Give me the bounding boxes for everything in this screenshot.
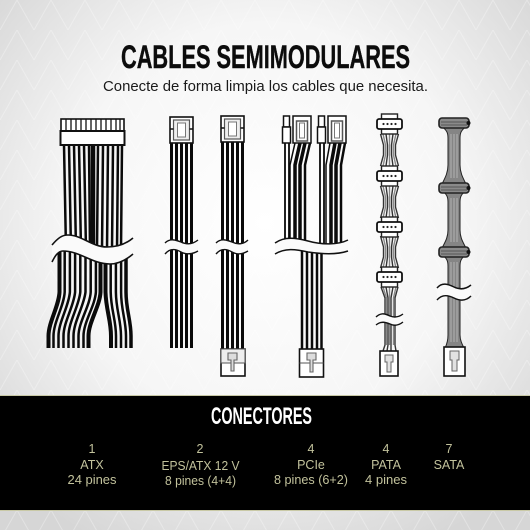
cable: EPS/ATX 12 V, right: [216, 116, 248, 376]
PCIe wires: [285, 143, 345, 350]
EPS cable break: [216, 240, 248, 254]
PATA wire segments: [380, 134, 398, 166]
column: SATA: [434, 442, 465, 472]
PATA connectors: [377, 114, 402, 134]
PATA bottom connector: [380, 351, 398, 376]
column: ATX: 1: [89, 442, 96, 456]
column: PATA: PATA: [371, 458, 402, 472]
EPS wires: [172, 143, 192, 348]
EPS connector: [170, 117, 193, 143]
column: PCIe: [274, 442, 348, 487]
column: PCIe: PCIe: [297, 458, 325, 472]
column: PATA: 4 pines: [365, 473, 407, 487]
column: ATX: 24 pines: [68, 473, 116, 487]
ATX upper wires: [64, 145, 122, 250]
EPS cable break: [165, 240, 198, 254]
column: EPS/ATX 12 V: 8 pines (4+4): [165, 474, 236, 488]
SATA bottom connector: [444, 347, 465, 376]
EPS wires: [222, 142, 242, 350]
column: PATA: [365, 442, 407, 487]
column: EPS/ATX 12 V: EPS/ATX 12 V: [162, 459, 240, 473]
column: PCIe: 4: [308, 442, 315, 456]
PCIe cable break: [275, 238, 348, 254]
connectors panel: [0, 395, 530, 511]
column: PCIe: 8 pines (6+2): [274, 473, 348, 487]
subtitle: Conecte de forma limpia los cables que necesita.: [103, 78, 428, 95]
EPS bottom connector: [221, 349, 245, 376]
cable: PATA: [376, 114, 403, 376]
column: EPS/ATX 12 V: [162, 442, 240, 488]
column: PATA: 4: [383, 442, 390, 456]
column: EPS/ATX 12 V: 2: [197, 442, 204, 456]
PCIe connector group 2: [318, 116, 346, 143]
ATX lower wires, splitting into two bundles: [48, 250, 131, 348]
SATA wire highlights: [451, 134, 457, 342]
panel heading: CONECTORES: [211, 403, 312, 430]
EPS top connector: [221, 116, 244, 142]
ATX cable break: [52, 235, 133, 264]
PCIe connector group 1: [282, 116, 311, 143]
SATA wires: [441, 126, 467, 348]
ATX connector: [60, 119, 124, 145]
SATA connectors: [439, 118, 470, 128]
column: ATX: ATX: [80, 458, 104, 472]
column: SATA: SATA: [434, 458, 465, 472]
SATA cable break: [437, 284, 471, 300]
cable: EPS/ATX 12 V, left: [165, 117, 198, 348]
cable: PCIe 6+2: [275, 116, 348, 377]
column: ATX: [68, 442, 116, 487]
PATA cable break: [376, 314, 403, 325]
PCIe bottom connector: [300, 349, 324, 377]
PATA lower wires: [381, 287, 398, 351]
column: SATA: 7: [446, 442, 453, 456]
cable: ATX 24 pines: [48, 119, 133, 348]
cable: SATA: [437, 118, 471, 376]
